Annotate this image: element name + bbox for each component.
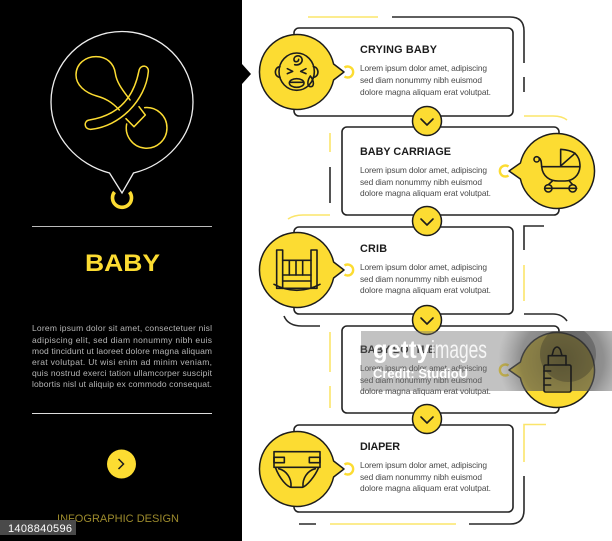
- panel: crying baby: [259, 28, 513, 116]
- text block: sed diam nonummy nibh euismod: [360, 177, 482, 187]
- text block: sed diam nonummy nibh euismod: [360, 75, 482, 85]
- text block: [360, 262, 491, 295]
- left panel: [0, 0, 251, 541]
- title: DIAPER: [360, 441, 400, 453]
- watermark band: Credit: StudioU: [373, 366, 468, 381]
- panel: baby bottle: [342, 326, 595, 413]
- text block: sed diam nonummy nibh euismod: [360, 375, 482, 385]
- title: BABY BOTTLE: [360, 344, 435, 356]
- text block: dolore magna aliquam erat volutpat.: [360, 285, 491, 295]
- text block: Lorem ipsum dolor amet, adipiscing: [360, 460, 487, 470]
- button: arrow: [107, 450, 136, 478]
- watermark band: getty: [373, 336, 430, 364]
- text block: [360, 460, 491, 493]
- watermark band: images: [431, 336, 487, 364]
- text block: [360, 165, 491, 198]
- text block: dolore magna aliquam erat volutpat.: [360, 87, 491, 97]
- paragraph: mod tincidunt ut laoreet dolore magna aliquam: [32, 346, 212, 356]
- text block: dolore magna aliquam erat volutpat.: [360, 188, 491, 198]
- paragraph: erat volutpat. Ut wisi enim ad minim veniam,: [32, 357, 212, 367]
- decorative outer lines: [284, 17, 567, 524]
- text block: dolore magna aliquam erat volutpat.: [360, 386, 491, 396]
- paragraph: quis nostrud exerci tation ullamcorper suscipit: [32, 368, 213, 378]
- footer label: INFOGRAPHIC DESIGN: [57, 513, 179, 525]
- text block: [360, 63, 491, 97]
- connector: chevron 1: [412, 106, 442, 136]
- connector: chevron 4: [412, 404, 442, 434]
- title: CRYING BABY: [360, 44, 438, 56]
- hero icon: pacifier in speech bubble: [51, 32, 193, 207]
- icon: crying baby face: [259, 35, 353, 110]
- panel: crib: [259, 227, 513, 314]
- panel: baby carriage: [342, 127, 595, 215]
- text block: dolore magna aliquam erat volutpat.: [360, 483, 491, 493]
- paragraph: adipiscing elit, sed diam nonummy nibh euis: [32, 335, 212, 345]
- text block: sed diam nonummy nibh euismod: [360, 274, 482, 284]
- watermark id tag: [0, 520, 76, 535]
- connector: chevron 2: [412, 206, 442, 236]
- watermark id tag: 1408840596: [8, 523, 72, 535]
- text block: Lorem ipsum dolor amet, adipiscing: [360, 63, 487, 73]
- text block: [360, 363, 491, 396]
- panel: diaper: [259, 425, 513, 512]
- text block: sed diam nonummy nibh euismod: [360, 472, 482, 482]
- title: CRIB: [360, 243, 387, 255]
- text block: Lorem ipsum dolor amet, adipiscing: [360, 262, 487, 272]
- paragraph: [32, 323, 213, 389]
- text block: Lorem ipsum dolor amet, adipiscing: [360, 165, 487, 175]
- icon: baby carriage: [500, 134, 595, 209]
- watermark band: [361, 331, 612, 391]
- icon: bubble for bottle: [500, 333, 595, 408]
- connector: chevron 3: [412, 306, 442, 334]
- paragraph: Lorem ipsum dolor sit amet, consectetuer nisl: [32, 323, 212, 333]
- text block: Lorem ipsum dolor amet, adipiscing: [360, 363, 487, 373]
- icon: crib: [259, 232, 353, 308]
- paragraph: lobortis nisl ut aliquip ex commodo consequat.: [32, 379, 212, 389]
- icon: baby bottle: [544, 347, 571, 392]
- title: BABY CARRIAGE: [360, 146, 451, 158]
- icon: diaper: [259, 432, 353, 507]
- heading: BABY: BABY: [85, 250, 160, 277]
